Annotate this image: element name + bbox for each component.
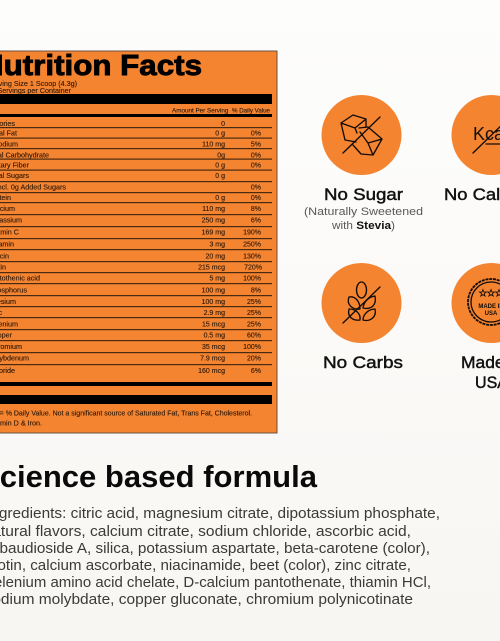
- nutrient table: 250%: [243, 242, 261, 248]
- nutrient table: 5 mg: [209, 276, 225, 282]
- badge: No Carbs: [322, 263, 403, 372]
- column headers: [172, 108, 270, 114]
- badge: No Sugar: [304, 95, 423, 232]
- nutrient table: 0%: [251, 195, 261, 202]
- nutrient table: 0%: [251, 152, 261, 160]
- label: No Carbs: No Carbs: [323, 353, 403, 372]
- nutrient table: 160 mcg: [198, 368, 225, 375]
- icon: made in USA seal: USA: [485, 311, 498, 317]
- nutrient table: 100 mg: [202, 288, 225, 294]
- nutrient table: 0%: [251, 162, 261, 170]
- footnote: [0, 408, 252, 428]
- nutrient table: 0 g: [215, 195, 225, 202]
- footnote: * = % Daily Value. Not a significant source of Saturated Fat, Trans Fat, Cholesterol.: [0, 408, 252, 418]
- sub-label: Naturally Sweetened with Stevia: with Stevia): [331, 220, 395, 232]
- nutrient table: 130%: [243, 254, 261, 260]
- column headers: Amount Per Serving: [172, 108, 229, 114]
- nutrient table: 0 g: [215, 162, 225, 170]
- sub-label: Naturally Sweetened with Stevia: [304, 206, 423, 232]
- nutrient table: [0, 119, 262, 375]
- nutrient table: 0 g: [215, 130, 225, 138]
- nutrient table: 100%: [243, 344, 261, 351]
- nutrient table: 100 mg: [202, 299, 225, 306]
- nutrient table: 250 mg: [202, 218, 225, 224]
- nutrient table: 2.9 mg: [204, 310, 225, 317]
- nutrient table: 6%: [251, 368, 261, 375]
- nutrient table: 60%: [247, 332, 261, 340]
- nutrient table: 5%: [251, 142, 261, 148]
- nutrient table: 0: [221, 121, 225, 128]
- nutrient table: 100%: [243, 276, 261, 282]
- badge: Made in USA: [452, 263, 500, 392]
- icon: made in USA seal: [452, 263, 500, 343]
- nutrient table: 0g: [217, 152, 225, 160]
- nutrient table: 0%: [251, 184, 261, 192]
- nutrient table: 0%: [251, 130, 261, 138]
- nutrient table: 35 mcg: [202, 344, 225, 351]
- nutrient table: 25%: [247, 299, 261, 306]
- nutrient table: 215 mcg: [198, 264, 225, 272]
- nutrient table: 25%: [247, 322, 261, 328]
- nutrient table: 720%: [244, 264, 262, 272]
- nutrient table: 15 mcg: [202, 322, 225, 328]
- serving info: [0, 79, 77, 95]
- text block: ingredients: [0, 506, 440, 608]
- nutrient table: 8%: [251, 288, 261, 294]
- nutrient table: 110 mg: [202, 142, 225, 148]
- sub-label: Naturally Sweetened with Stevia: (Naturally Sweetened: [304, 206, 423, 218]
- nutrient table: 169 mg: [202, 230, 225, 236]
- nutrient table: 6%: [251, 218, 261, 224]
- nutrient table: 110 mg: [202, 206, 225, 213]
- icon: no sugar cubes: [322, 95, 402, 175]
- nutrient table: 0.5 mg: [204, 332, 225, 340]
- nutrient table: 20 mg: [206, 254, 225, 260]
- nutrient table: 20%: [247, 356, 261, 362]
- icon: no carbs wheat: [322, 263, 402, 343]
- nutrient table: 190%: [243, 230, 261, 236]
- row dividers: [0, 127, 272, 365]
- nutrient table: 7.9 mcg: [200, 356, 225, 362]
- badge: No Calories: [444, 95, 500, 204]
- nutrient table: 25%: [247, 310, 261, 317]
- nutrient table: 3 mg: [209, 242, 225, 248]
- nutrient table: 0 g: [215, 173, 225, 180]
- label: Made in USA: [461, 353, 500, 392]
- column headers: % Daily Value: [232, 108, 270, 114]
- panel: nutrition facts label: [0, 50, 277, 433]
- label: No Sugar: No Sugar: [324, 185, 403, 204]
- nutrient table: 8%: [251, 206, 261, 213]
- black header bars: [0, 94, 272, 404]
